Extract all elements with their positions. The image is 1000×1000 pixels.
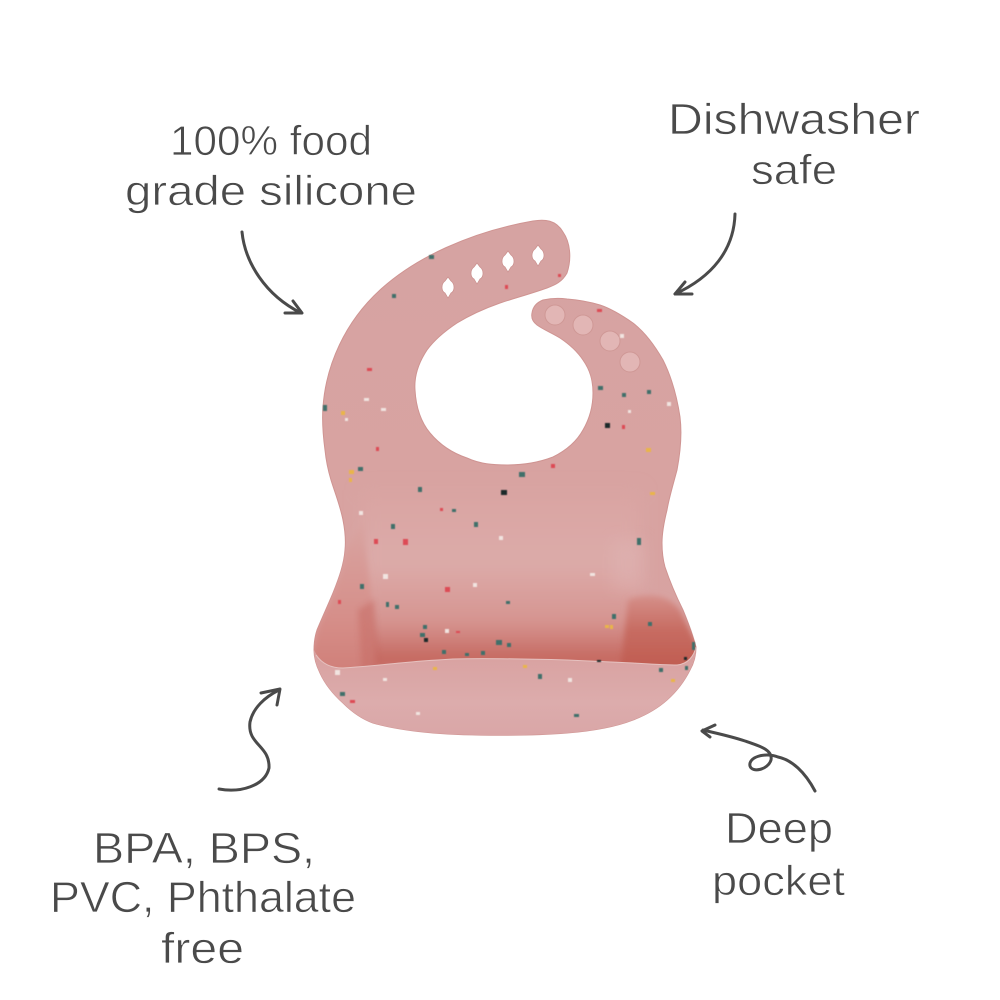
arrow: to strap from silicone label	[242, 232, 302, 313]
heading: 100% food grade silicone: 100% food	[170, 117, 372, 164]
heading: BPA, BPS, PVC, Phthalate free: BPA, BPS,	[93, 824, 315, 873]
bib	[305, 220, 702, 740]
heading: BPA, BPS, PVC, Phthalate free: free	[161, 924, 244, 973]
heading: Dishwasher safe	[668, 95, 920, 193]
arrow: to pocket from deep pocket label	[702, 725, 815, 791]
heading: Deep pocket: pocket	[712, 857, 845, 904]
arrow: to neck snaps from dishwasher label	[675, 214, 735, 294]
confetti speckles	[323, 255, 695, 717]
neck snap buttons	[545, 305, 640, 372]
heading: BPA, BPS, PVC, Phthalate free	[50, 824, 356, 973]
pocket front lip	[308, 647, 702, 740]
pocket interior shading	[314, 539, 696, 736]
bib body	[314, 220, 696, 735]
heading: BPA, BPS, PVC, Phthalate free: PVC, Phthalate	[50, 873, 356, 922]
heading: Dishwasher safe: safe	[751, 146, 837, 193]
strap slots	[442, 245, 544, 298]
heading: Deep pocket: Deep	[725, 804, 833, 853]
heading: Dishwasher safe: Dishwasher	[668, 95, 920, 144]
heading: 100% food grade silicone: grade silicone	[125, 167, 417, 214]
heading: Deep pocket	[712, 804, 845, 904]
arrow: to bib from BPA label	[219, 689, 280, 790]
heading: 100% food grade silicone	[125, 117, 417, 214]
